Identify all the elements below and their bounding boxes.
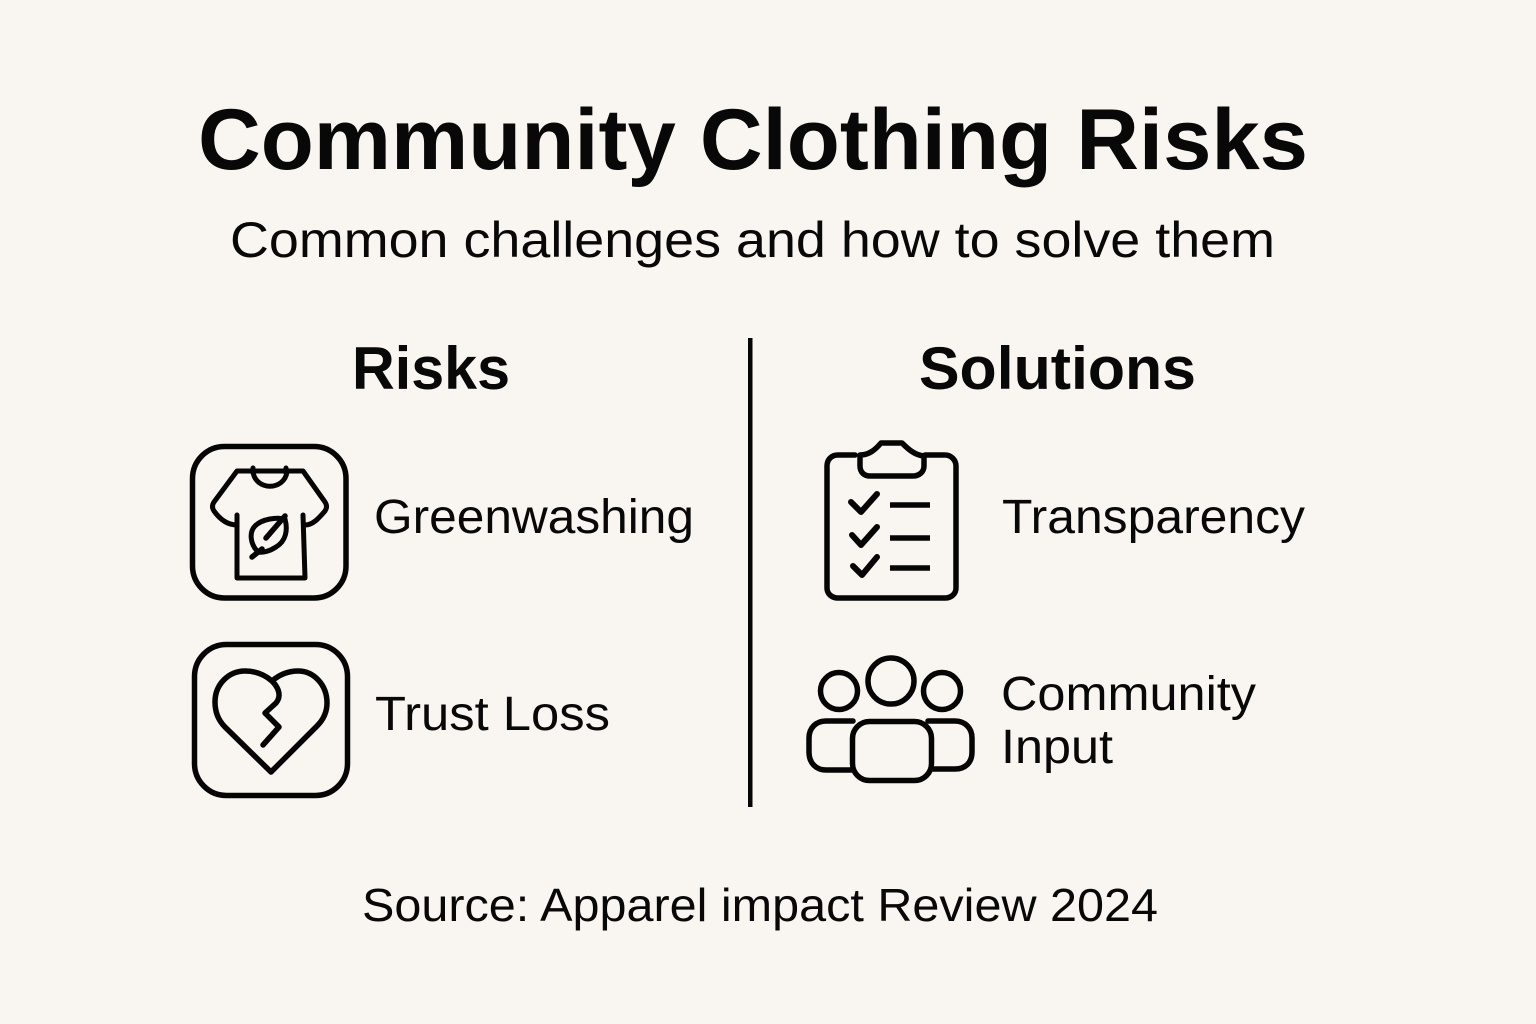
heading: solutions: Solutions [919,335,1196,402]
source note: Source: Apparel impact Review 2024 [362,879,1158,931]
icon: broken heart [194,644,348,796]
icon: community group [809,658,972,780]
label: community input: Input [1001,721,1113,774]
center divider [748,338,752,807]
label: trust loss: Trust Loss [375,688,610,741]
subtitle: Common challenges and how to solve them [230,212,1275,268]
label: community input: Community [1001,668,1256,721]
icon: clipboard checklist [827,443,956,598]
icon: t-shirt with leaf [192,446,346,598]
title: Community Clothing Risks [198,92,1308,188]
heading: risks: Risks [352,335,510,402]
label: greenwashing: Greenwashing [374,491,694,544]
label: transparency: Transparency [1002,491,1305,544]
